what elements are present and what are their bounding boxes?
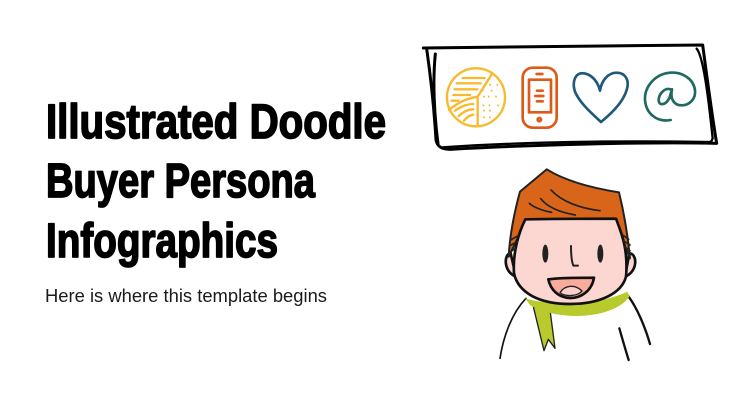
icon: smartphone: [523, 68, 557, 128]
subtitle: Here is where this template begins: [45, 286, 327, 306]
icon: pie chart: [447, 68, 505, 126]
title: [46, 96, 386, 268]
hair back: [509, 169, 630, 258]
torso: [500, 295, 650, 360]
eyes and nose: [542, 245, 603, 266]
character: buyer persona: [500, 169, 650, 360]
title: Infographics: [46, 215, 278, 268]
icon: at sign: [645, 73, 695, 120]
icon: heart: [574, 73, 628, 122]
face: [514, 219, 626, 304]
sketched frame: [423, 45, 717, 149]
icon panel: [423, 45, 717, 149]
scarf: [525, 292, 629, 351]
mouth: [548, 278, 594, 298]
hair strands: [509, 190, 630, 253]
title: Buyer Persona: [46, 155, 315, 208]
title: Illustrated Doodle: [46, 96, 386, 149]
ears: [506, 253, 635, 277]
